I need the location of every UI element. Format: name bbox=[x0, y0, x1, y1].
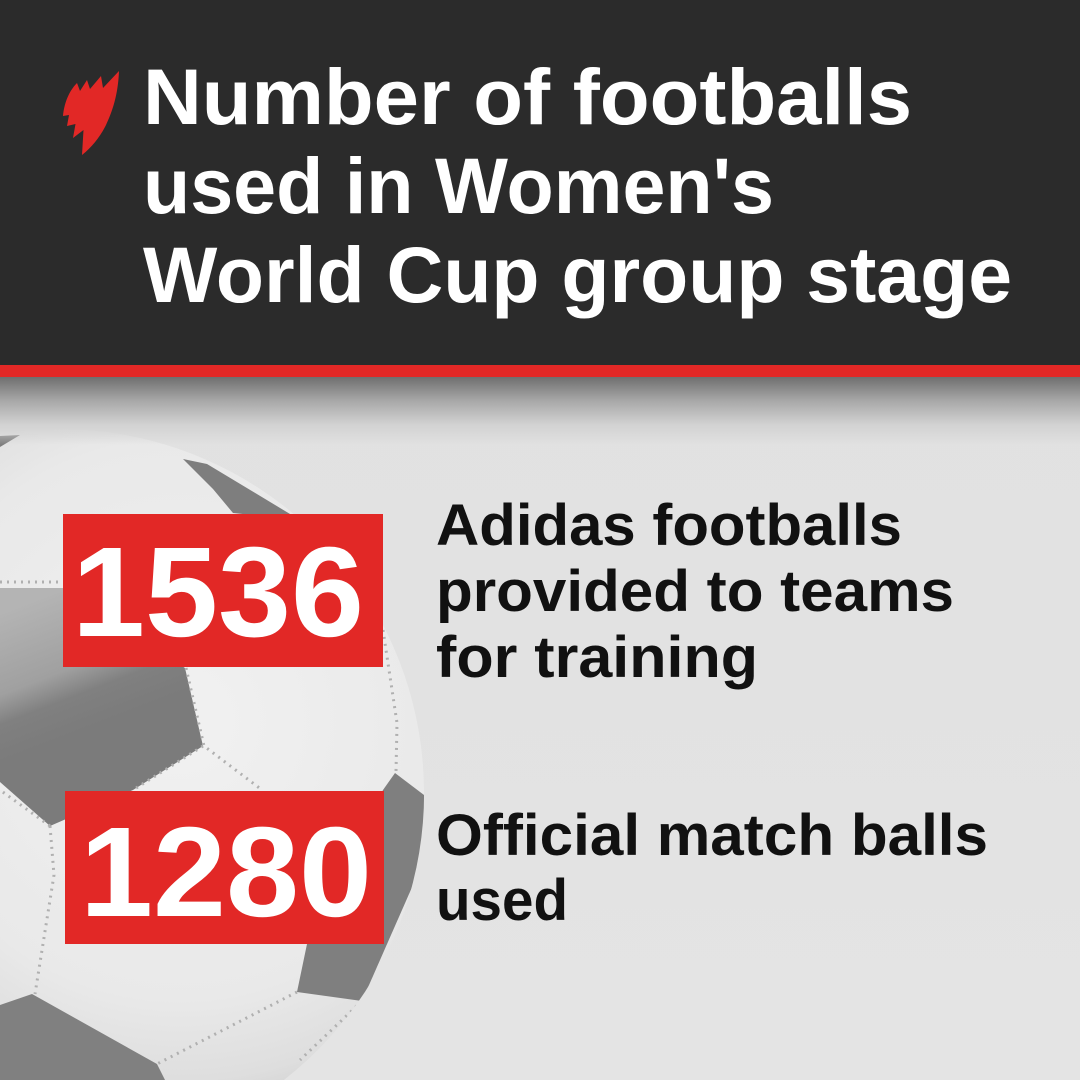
stat description: Official match balls: Official match balls bbox=[436, 803, 988, 868]
title: Number of footballs bbox=[143, 52, 912, 141]
title bbox=[143, 52, 1012, 319]
stat box: 1280: 1280 bbox=[80, 801, 372, 944]
icon: SBS logo bbox=[63, 71, 119, 155]
stat description: Official match balls bbox=[436, 803, 988, 933]
title: World Cup group stage bbox=[143, 230, 1012, 319]
top shadow gradient bbox=[0, 377, 1080, 445]
stat description: Adidas footballs: Adidas footballs bbox=[436, 493, 902, 558]
red divider bar bbox=[0, 365, 1080, 377]
stat description: Adidas footballs bbox=[436, 493, 954, 690]
stat box: 1536: 1536 bbox=[72, 521, 364, 664]
header band bbox=[0, 0, 1080, 365]
stat description: Official match balls: used bbox=[436, 868, 568, 933]
football image bbox=[0, 429, 424, 1080]
title: used in Women's bbox=[143, 141, 774, 230]
stat description: Adidas footballs: for training bbox=[436, 625, 758, 690]
stat description: Adidas footballs: provided to teams bbox=[436, 559, 954, 624]
background bbox=[0, 377, 1080, 1080]
